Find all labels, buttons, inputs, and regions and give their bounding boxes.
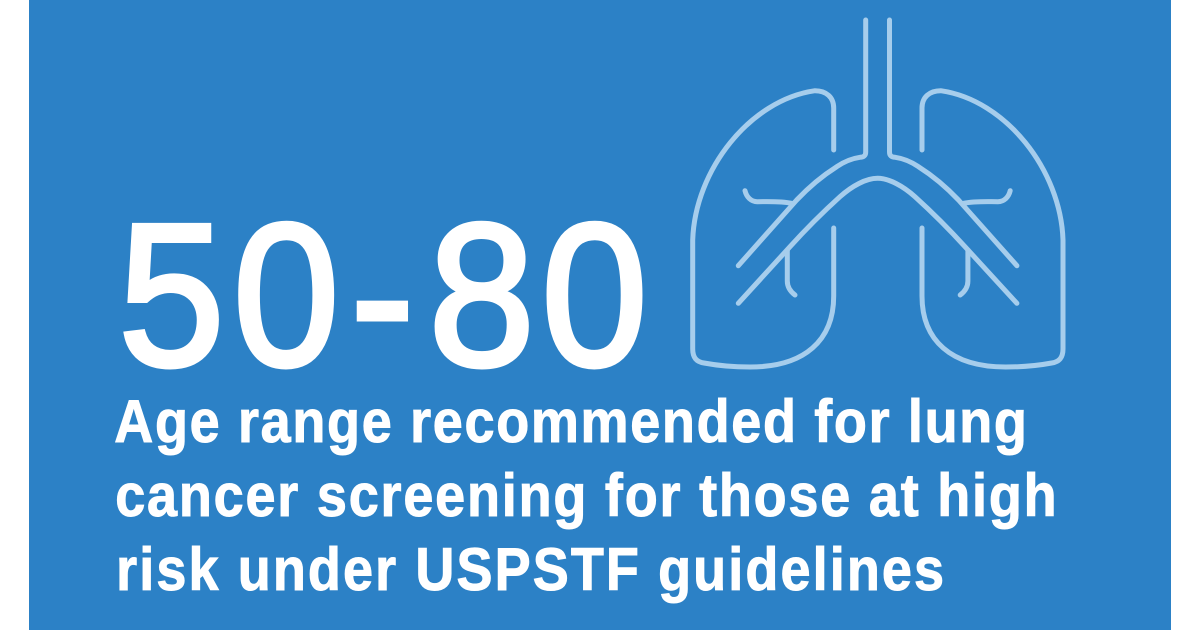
right lung branches (963, 191, 1010, 203)
line 3: risk under USPSTF guidelines (116, 536, 944, 604)
line 1: Age range recommended for lung (114, 388, 1027, 456)
lower bronchi (738, 178, 1017, 303)
line 2: cancer screening for those at high (115, 462, 1057, 530)
left lung outline (693, 91, 834, 367)
left lung branches (745, 191, 792, 203)
description text (114, 388, 1057, 604)
right lung outline (922, 91, 1063, 367)
icon: lungs (693, 20, 1063, 367)
trachea and upper bronchi (738, 20, 866, 266)
big number: 50-80: 50-80 (118, 182, 648, 408)
